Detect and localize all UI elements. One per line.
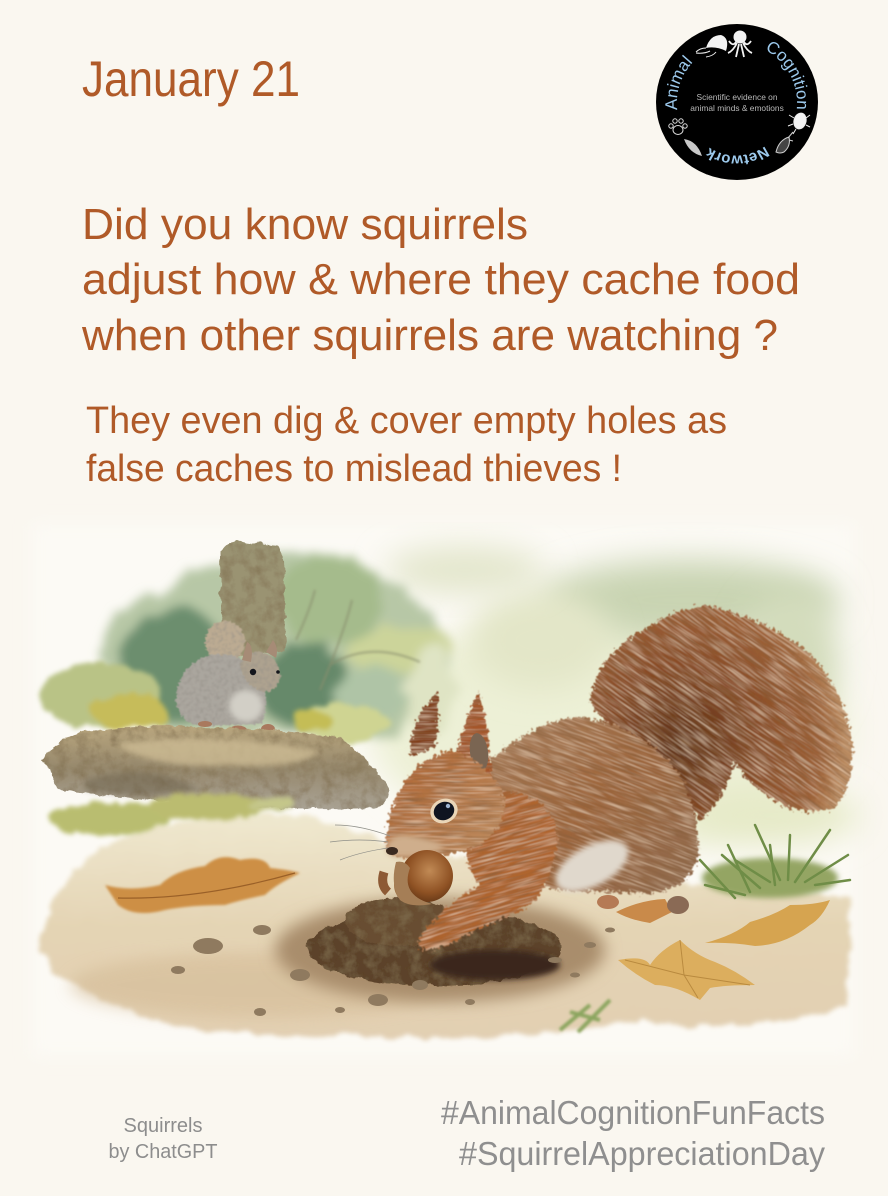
stone pillar: [220, 541, 286, 660]
whiskers: [330, 825, 390, 860]
red squirrel hind foot: [597, 895, 689, 923]
subheading: false caches to mislead thieves !: [86, 448, 622, 490]
icon: beetle: [788, 112, 810, 134]
logo tagline: Scientific evidence on: [696, 92, 778, 102]
left foliage: [100, 552, 455, 735]
left oak leaf: [105, 857, 300, 913]
logo arc text: Animal: Animal: [665, 54, 692, 110]
headline: [81, 200, 800, 360]
red squirrel nose: [386, 847, 398, 855]
red squirrel muzzle: [386, 835, 445, 857]
headline: when other squirrels are watching ?: [81, 311, 778, 360]
logo arc text: Network: Network: [706, 146, 770, 164]
icon: octopus: [728, 30, 752, 57]
background wash: [370, 546, 860, 850]
red squirrel body: [428, 648, 755, 962]
date heading: January 21: [82, 51, 300, 107]
hashtags: #SquirrelAppreciationDay: [459, 1135, 825, 1172]
grey squirrel ears: [242, 640, 277, 662]
icon: feather: [684, 139, 702, 156]
maple leaf: [618, 940, 755, 1000]
image credit: Squirrels: [124, 1115, 202, 1137]
left fern tufts: [40, 661, 387, 742]
icon: paw: [669, 119, 687, 134]
grey squirrel: [176, 621, 280, 734]
logo tagline: [690, 92, 784, 113]
ferns below rock: [48, 792, 294, 834]
scattered pebbles: [171, 925, 615, 1016]
tree branches: [296, 590, 420, 690]
icon: fish: [776, 132, 793, 153]
grey squirrel tail: [205, 621, 245, 663]
subheading: [86, 400, 727, 490]
soil hole: [275, 898, 605, 1002]
grey squirrel head: [240, 652, 280, 692]
red squirrel tail: [489, 482, 888, 943]
hazelnut: [383, 850, 453, 905]
small grass sprout: [560, 1000, 610, 1032]
grey squirrel eyes: [250, 669, 280, 675]
logo arc text: Cognition: Cognition: [768, 42, 808, 109]
paper panel: [32, 524, 854, 1056]
logo tagline: animal minds & emotions: [690, 103, 784, 113]
rock: [42, 726, 390, 809]
grey squirrel chest: [229, 690, 263, 722]
headline: Did you know squirrels: [82, 200, 528, 249]
grey squirrel feet: [198, 721, 275, 734]
ground: [38, 815, 850, 1038]
image credit: [108, 1115, 218, 1163]
subheading: They even dig & cover empty holes as: [86, 400, 727, 442]
hashtags: [441, 1094, 825, 1172]
red squirrel ears: [411, 692, 492, 792]
icon: jellyfish: [696, 35, 727, 57]
right oak leaf: [705, 900, 830, 946]
red squirrel head: [386, 750, 504, 858]
red squirrel belly: [547, 830, 637, 902]
illustration: two squirrels in a watercolor scene: [32, 482, 888, 1056]
red squirrel eye: [426, 794, 462, 828]
grey squirrel body: [176, 654, 266, 726]
logo: Animal Cognition Network badge: [656, 24, 818, 180]
lower tan ground wash: [70, 953, 450, 1017]
right grass tuft: [700, 825, 850, 898]
image credit: by ChatGPT: [108, 1141, 218, 1163]
hashtags: #AnimalCognitionFunFacts: [441, 1094, 825, 1131]
headline: adjust how & where they cache food: [82, 255, 800, 304]
red squirrel foreleg: [378, 755, 598, 985]
